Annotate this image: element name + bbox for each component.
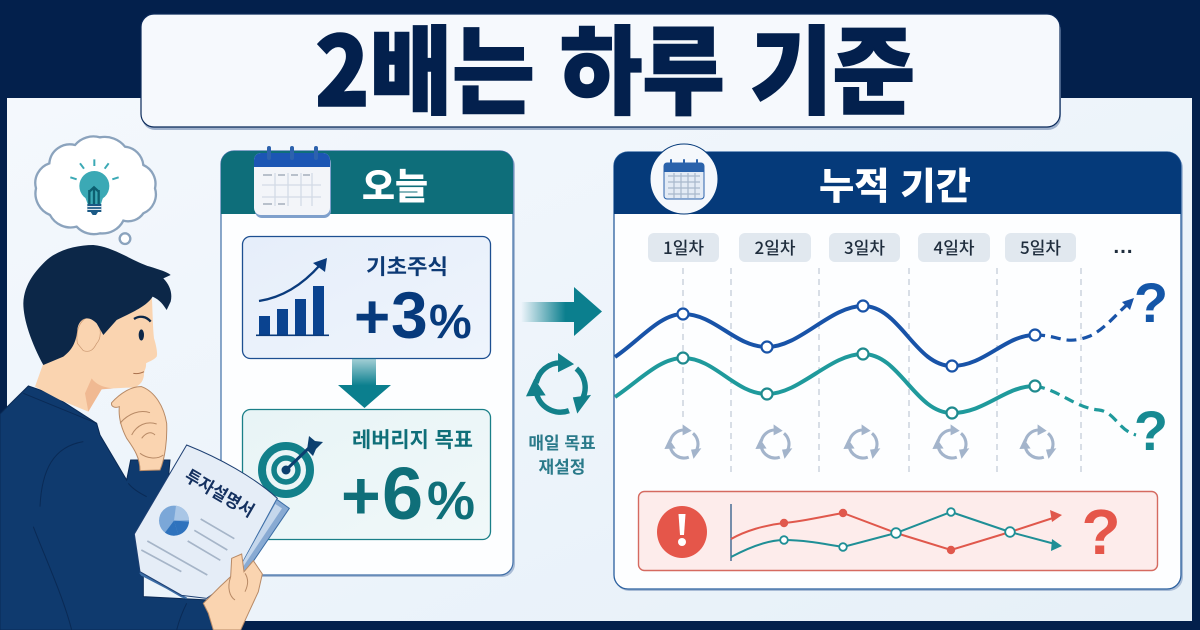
icon: calendar xyxy=(254,148,331,218)
pie icon xyxy=(159,506,189,536)
question mark: teal: ? xyxy=(1134,399,1168,462)
value: +6%: 6 xyxy=(382,452,423,535)
value: +3%: + xyxy=(354,283,390,352)
icon: rising bar chart xyxy=(256,258,329,336)
icon: daily reset cycle xyxy=(526,353,591,414)
label: daily target reset: 매일 목표 xyxy=(528,429,596,454)
panel: cumulative period xyxy=(614,144,1183,591)
panel: today xyxy=(221,148,515,577)
hand at chin xyxy=(112,387,167,471)
question mark: blue: ? xyxy=(1134,271,1168,334)
line chart: blue series xyxy=(615,298,1134,372)
day labels: 5일차 xyxy=(1020,234,1061,259)
value: +6%: + xyxy=(341,458,381,534)
today heading: 오늘 xyxy=(362,158,428,210)
lower hand holding book xyxy=(203,554,262,630)
callout: divergence warning xyxy=(638,492,1158,570)
day labels: 2일차 xyxy=(755,234,796,259)
arrow: today to cumulative xyxy=(521,287,602,336)
day labels: … xyxy=(1112,235,1134,258)
label: daily target reset: 재설정 xyxy=(539,453,585,478)
value: +3%: 3 xyxy=(391,278,428,352)
ear xyxy=(77,317,100,351)
eye and brow xyxy=(133,317,151,374)
mini chart: crossing lines xyxy=(731,504,1062,561)
day labels: 4일차 xyxy=(934,234,975,259)
label: underlying: 기초주식 xyxy=(366,251,448,281)
icon: target with dart xyxy=(262,436,323,494)
box: underlying stock xyxy=(242,236,490,358)
neck and face xyxy=(35,293,157,412)
line chart: teal series xyxy=(615,348,1136,435)
arrow: down to target xyxy=(338,358,391,408)
book xyxy=(134,445,289,598)
label: leverage target: 레버리지 목표 xyxy=(352,424,473,454)
day labels xyxy=(648,233,1134,262)
title banner xyxy=(141,0,1061,134)
icon: exclamation xyxy=(657,506,707,558)
cumulative heading: 누적 기간 xyxy=(819,156,971,210)
jacket body xyxy=(0,386,213,630)
cumulative header band xyxy=(614,152,1181,214)
day labels: 1일차 xyxy=(663,234,704,259)
value: +3%: % xyxy=(429,296,472,349)
question mark: red: ? xyxy=(1081,496,1121,568)
day labels: 3일차 xyxy=(844,234,885,259)
day grid lines xyxy=(683,268,1081,475)
hair xyxy=(23,245,171,365)
icon: round calendar xyxy=(650,144,718,214)
value: +6%: % xyxy=(427,471,475,531)
thought bubble with light bulb xyxy=(35,136,156,244)
book title: 투자설명서 xyxy=(181,462,260,522)
today header band xyxy=(221,151,513,214)
icons: daily reset cycles xyxy=(664,424,1056,459)
thinking person illustration xyxy=(0,136,289,630)
box: leverage target xyxy=(242,410,490,540)
